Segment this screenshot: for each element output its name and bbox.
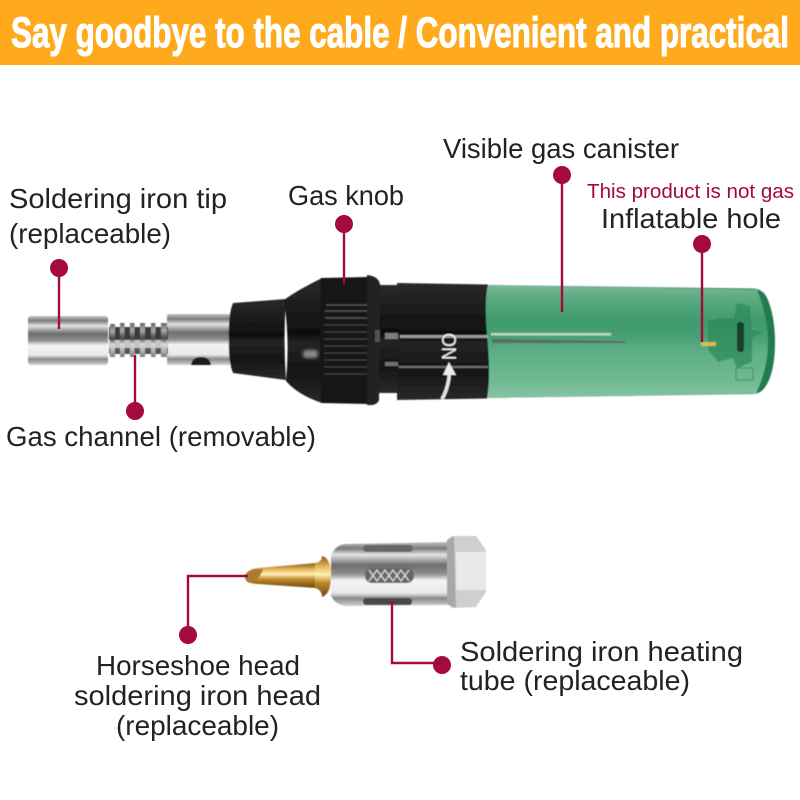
label: Soldering iron tip — [9, 183, 227, 214]
green gas canister — [484, 285, 775, 398]
label: (replaceable) — [116, 710, 279, 741]
soldering torch — [28, 275, 775, 405]
hex nut — [447, 536, 486, 608]
note: This product is not gas — [587, 181, 794, 203]
black nozzle — [229, 278, 322, 403]
callout: gas knob — [288, 180, 404, 284]
label: Gas knob — [288, 180, 404, 211]
header banner — [0, 0, 800, 65]
label: soldering iron head — [74, 680, 321, 711]
torch tip cylinder — [28, 316, 108, 365]
callout: inflatable hole — [587, 181, 794, 342]
label: (replaceable) — [9, 218, 171, 249]
callout: heating tube — [392, 601, 743, 696]
callout: soldering iron tip — [9, 183, 227, 329]
label: Inflatable hole — [601, 203, 781, 234]
steel tube — [331, 542, 447, 606]
gas knob — [320, 275, 380, 405]
collar nut — [378, 285, 400, 393]
black body with ON marking — [397, 283, 489, 400]
label: Gas channel (removable) — [6, 421, 316, 452]
gas channel spring — [109, 323, 168, 357]
callout: horseshoe head — [74, 576, 321, 741]
label: Horseshoe head — [96, 650, 300, 681]
callout: gas channel — [6, 355, 316, 452]
callout: visible gas canister — [443, 133, 679, 312]
label: Visible gas canister — [443, 133, 679, 164]
horseshoe gold tip — [245, 556, 331, 597]
heating tube assembly — [245, 536, 486, 608]
ON arrow: ON — [437, 333, 460, 360]
label: tube (replaceable) — [460, 665, 690, 696]
label: Soldering iron heating — [460, 636, 743, 667]
torch collar — [167, 314, 232, 365]
